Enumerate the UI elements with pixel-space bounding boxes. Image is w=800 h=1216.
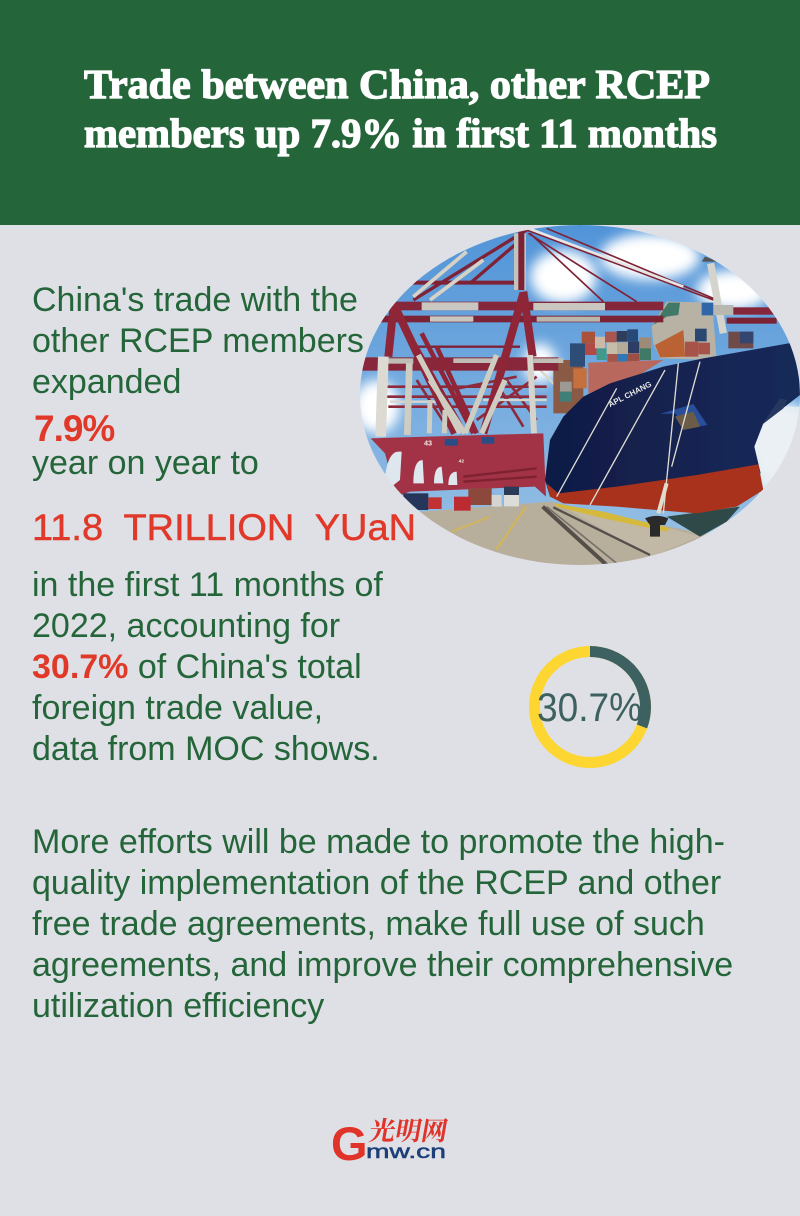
body text with 30.7% highlight: 2022, accounting for	[32, 607, 340, 645]
body text with 30.7% highlight: data from MOC shows.	[32, 730, 380, 768]
container stacks	[553, 302, 753, 413]
closing paragraph: free trade agreements, make full use of such	[32, 905, 705, 943]
photo: container ship moored beside port cranes: 43	[424, 439, 432, 448]
distant crane frames	[387, 377, 547, 427]
donut chart: 30.7%: 30.7%	[537, 686, 642, 730]
intro text: expanded	[32, 363, 181, 401]
figure: 11.8 trillion yuan: 11.8 TRILLION YUaN	[32, 507, 416, 548]
text: year on year: year on year to	[32, 444, 259, 482]
title banner	[0, 0, 800, 225]
ship hull	[545, 342, 800, 497]
donut chart: 30.7%	[529, 646, 651, 768]
bollard and quay edge	[553, 503, 670, 532]
closing paragraph: agreements, and improve their comprehensive	[32, 946, 733, 984]
harbour water	[667, 507, 740, 537]
trucks on the quay	[403, 493, 428, 510]
photo: container ship moored beside port cranes	[360, 225, 800, 565]
body text with 30.7% highlight: foreign trade value,	[32, 689, 323, 727]
title: members up 7.9% in first 11 months	[84, 110, 717, 156]
mooring ropes	[557, 362, 700, 513]
photo: container ship moored beside port cranes: 42	[459, 459, 464, 465]
closing paragraph: More efforts will be made to promote the high-	[32, 823, 725, 861]
closing paragraph: utilization efficiency	[32, 987, 324, 1025]
body text with 30.7% highlight: in the first 11 months of	[32, 566, 383, 604]
closing paragraph: quality implementation of the RCEP and other	[32, 864, 721, 902]
intro text	[32, 281, 364, 401]
figure: 7.9%: 7.9%	[34, 408, 114, 449]
body text with 30.7% highlight: 30.7% of China's total	[32, 648, 362, 686]
title	[84, 61, 717, 157]
title: Trade between China, other RCEP	[84, 61, 710, 107]
crane gantry base	[371, 433, 546, 497]
closing paragraph	[32, 823, 733, 1025]
crane tower	[514, 233, 526, 290]
mast	[711, 263, 723, 333]
logo: Guangming net	[331, 1112, 450, 1164]
crane boom	[413, 228, 713, 347]
body text with 30.7% highlight	[32, 566, 383, 768]
main horizontal beams	[397, 302, 663, 310]
photo: container ship moored beside port cranes: APL CHANG	[607, 380, 653, 409]
crane legs	[381, 292, 534, 437]
logo: Guangming net: mw.cn	[366, 1142, 446, 1163]
intro text: other RCEP members	[32, 322, 364, 360]
ground	[420, 502, 706, 565]
intro text: China's trade with the	[32, 281, 358, 319]
